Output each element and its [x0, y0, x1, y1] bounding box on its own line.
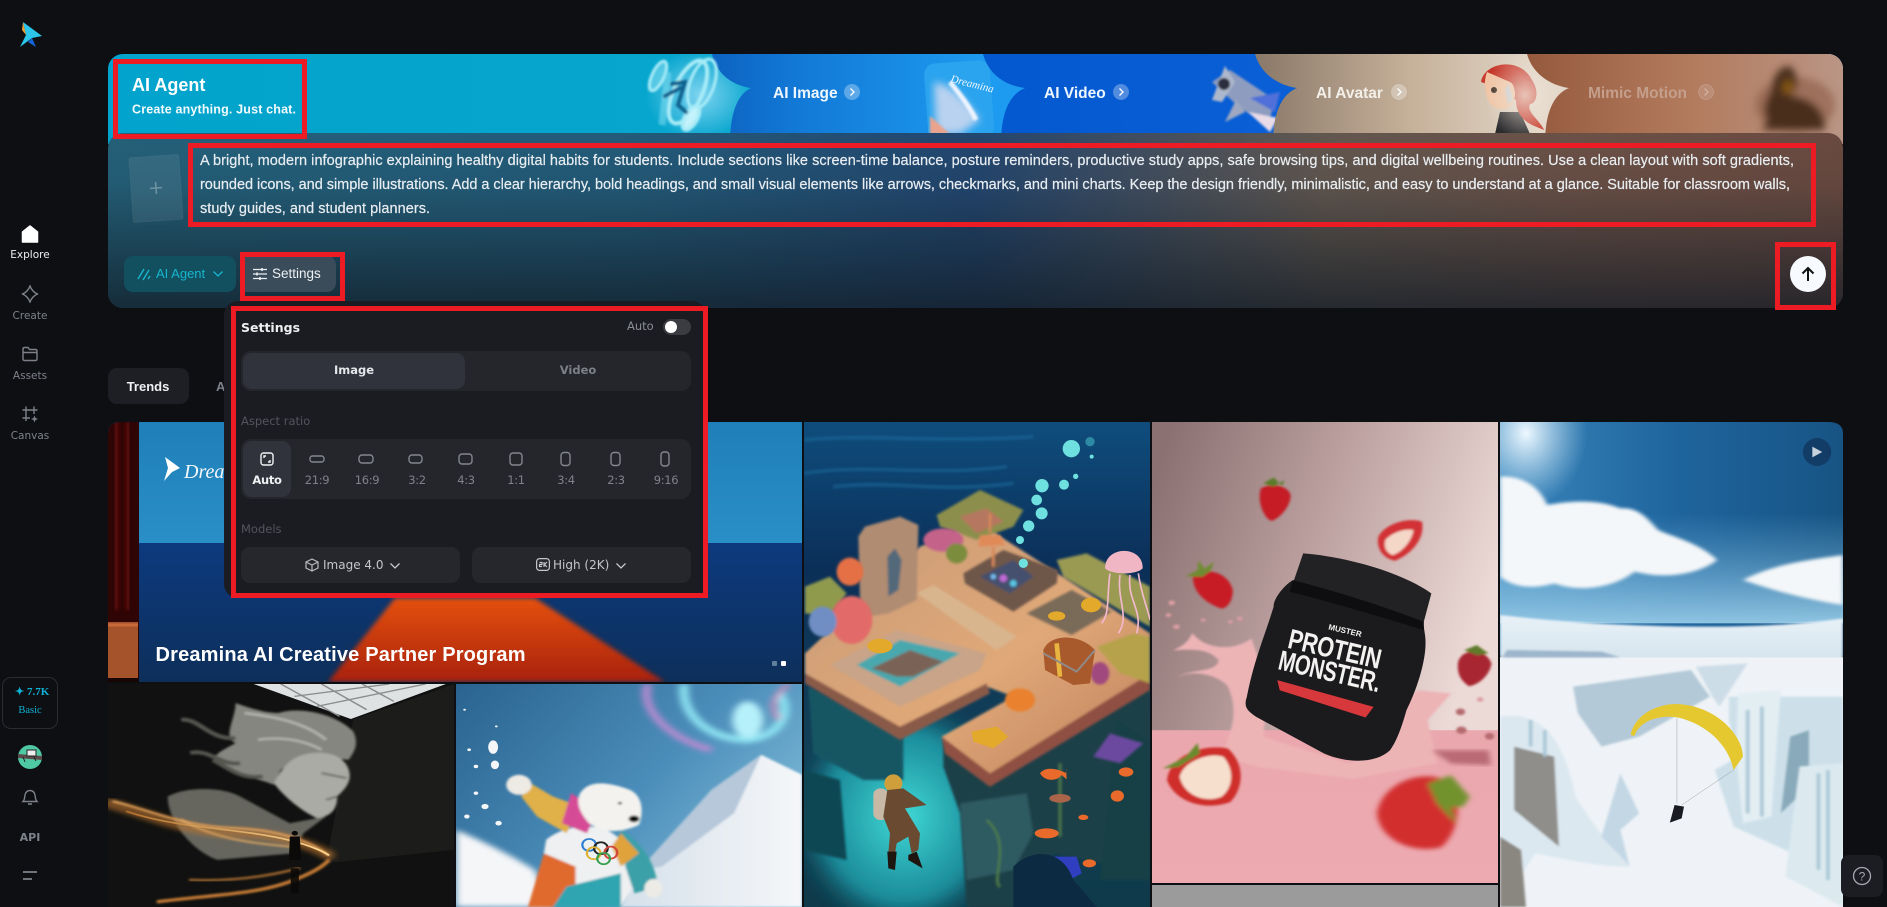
prompt text	[200, 153, 1794, 217]
sidebar	[2, 22, 58, 880]
highlight box: ai agent heading	[113, 59, 307, 139]
image: polar bear snowboarder	[456, 684, 802, 907]
button: ai agent mode	[124, 256, 236, 292]
tab: trends	[108, 368, 189, 404]
button: settings: Settings	[272, 266, 321, 281]
icon: notifications bell	[22, 790, 38, 805]
treasure chest	[1043, 638, 1095, 685]
diver	[873, 774, 927, 870]
strawberries	[1162, 477, 1491, 806]
stone arch	[858, 517, 918, 617]
nav: create	[13, 285, 47, 322]
avatar	[18, 745, 42, 769]
nav: assets: Assets	[13, 370, 47, 382]
hero panel background	[108, 54, 1843, 308]
ratio labels: 3:2	[408, 473, 426, 487]
video play badge	[1803, 438, 1831, 466]
prompt panel background	[108, 133, 1843, 323]
icon: app logo	[20, 22, 42, 47]
banner: teal ai agent section	[108, 54, 1843, 144]
settings popover	[224, 301, 706, 598]
tab: ai avatar: AI Avatar	[1316, 85, 1383, 102]
jar label text: MONSTER.	[1276, 645, 1383, 698]
tab: trends: Trends	[127, 379, 169, 394]
tab: mimic motion: Mimic Motion	[1588, 85, 1687, 102]
media type tabs	[241, 351, 691, 391]
banner: ai image section	[712, 54, 1843, 133]
sculpture head	[168, 703, 356, 860]
send button	[1790, 256, 1826, 292]
ratio labels: 4:3	[457, 473, 475, 487]
tab: ai image: AI Image	[773, 85, 838, 102]
light ribbon	[109, 802, 328, 902]
prompt text: study guides, and student planners.	[200, 201, 430, 217]
ratio labels: 9:16	[654, 473, 678, 487]
help button: ?	[1859, 870, 1866, 884]
illustration: ai video thumbnail	[924, 60, 994, 133]
icon: menu	[23, 871, 37, 880]
glow near ai image tip	[648, 54, 750, 133]
nav: canvas	[11, 406, 49, 442]
paraglider pilot	[1670, 805, 1684, 823]
highlight box: settings panel	[231, 306, 708, 598]
tab: ai avatar	[1316, 84, 1407, 102]
aspect ratio options	[241, 439, 691, 499]
ratio labels: 16:9	[355, 473, 379, 487]
aspect ratio label: Aspect ratio	[241, 414, 310, 428]
jar	[1246, 553, 1431, 761]
corals	[809, 528, 1143, 763]
image: partner program banner	[108, 422, 802, 682]
button: settings	[245, 256, 336, 292]
model selector	[241, 547, 460, 583]
curtain	[108, 422, 139, 682]
credits badge: ✦ 7.7K	[15, 686, 49, 698]
quality selector	[472, 547, 691, 583]
banner title: Dreamina AI Creative Partner Program	[156, 644, 526, 666]
settings title: Settings	[241, 320, 300, 335]
clouds	[1500, 477, 1843, 605]
dark rock	[1013, 854, 1097, 907]
gold objects	[867, 598, 1101, 748]
snow mountain	[621, 755, 802, 907]
ratio labels: 1:1	[507, 473, 525, 487]
polar bear	[506, 775, 663, 907]
dreamina logo	[164, 457, 224, 481]
horizon haze	[1500, 615, 1843, 663]
bubbles	[1016, 437, 1095, 568]
credits badge	[2, 677, 58, 729]
models label: Models	[241, 522, 282, 536]
illustration: glass runner	[646, 55, 722, 132]
ratio labels: 21:9	[305, 473, 329, 487]
carousel dots	[772, 661, 786, 666]
ice canyon	[1500, 650, 1843, 907]
treasure well	[963, 513, 1058, 612]
jar label text: PROTEIN	[1285, 623, 1384, 675]
help button	[1841, 855, 1883, 897]
illustration: airplane	[1212, 66, 1280, 132]
image: sculpture	[108, 684, 454, 905]
illustration: red-haired girl	[1481, 64, 1544, 134]
ratio labels: Auto	[252, 473, 282, 487]
banner: ai avatar section	[1255, 54, 1843, 133]
illustration: ai video thumbnail: Dreamina	[948, 73, 996, 96]
tab: image active: Image	[334, 363, 374, 377]
milk splash	[1166, 600, 1494, 779]
image: isometric underwater ruins	[804, 422, 1150, 907]
skylight	[254, 684, 446, 719]
prompt text: rounded icons, and simple illustrations. Add a clear hierarchy, bold headings, and small visual elements like arrows, checkmarks, and mini charts. Keep the design friendly, minimalistic, and easy to understand at a glance. Suitable for classroom walls,	[200, 177, 1790, 193]
snow plain	[1500, 657, 1843, 907]
option: auto active	[243, 441, 291, 497]
treasure table	[1027, 590, 1112, 635]
fish	[1035, 767, 1133, 883]
glow near mimic motion tip	[1491, 64, 1544, 133]
ratio labels: 3:4	[557, 473, 575, 487]
olympic rings	[582, 839, 617, 864]
illustration: silhouette	[1755, 66, 1835, 133]
api link: API	[20, 831, 40, 844]
auto toggle: Auto	[627, 319, 654, 333]
ratio labels	[252, 473, 678, 487]
highlight box: send button	[1775, 242, 1836, 310]
tab: image active	[243, 353, 465, 389]
yellow paraglider	[1631, 704, 1743, 805]
lower stone pillars	[804, 687, 1150, 907]
credits badge: Basic	[18, 705, 42, 716]
nav: canvas: Canvas	[11, 430, 49, 442]
nav: assets	[13, 346, 47, 382]
heading: ai agent	[132, 75, 296, 116]
nav: explore: Explore	[10, 249, 50, 261]
tab: partly hidden: A	[216, 379, 225, 394]
prompt text: A bright, modern infographic explaining healthy digital habits for students. Include sections like screen-time balance, posture reminders, productive study apps, safe browsing tips, and digital wellbeing routines. Use a clean layout with soft gradients,	[200, 153, 1794, 169]
heading: ai agent: AI Agent	[132, 75, 205, 95]
highlight box: settings button	[240, 252, 345, 301]
banner: mimic motion section	[1527, 54, 1843, 144]
add reference image card	[129, 154, 183, 223]
snow spray	[456, 709, 553, 907]
jellyfish	[1102, 551, 1150, 633]
image: protein monster product	[1152, 422, 1498, 883]
image: grey wood tile	[1152, 885, 1498, 907]
highlight box: prompt	[188, 143, 1816, 227]
standing figure	[289, 831, 301, 893]
aurora swirl	[646, 684, 788, 750]
tab: ai video: AI Video	[1044, 85, 1106, 102]
tab: ai video	[1044, 84, 1129, 102]
jar label text: MUSTER	[1328, 623, 1363, 639]
button: ai agent mode: AI Agent	[156, 266, 205, 281]
nav: create: Create	[13, 310, 47, 322]
nav: explore	[10, 225, 50, 261]
teal glow water	[790, 697, 1017, 907]
banner: ai video section	[983, 54, 1843, 133]
subheading: Create anything. Just chat.	[132, 102, 296, 116]
quality selector: High (2K)	[553, 558, 609, 572]
dreamina logo: Dreamina	[183, 461, 264, 483]
tab: video: Video	[560, 363, 596, 377]
auto toggle	[627, 319, 691, 335]
model selector: Image 4.0	[323, 558, 383, 572]
island stone platform	[805, 490, 1150, 787]
ratio labels: 2:3	[607, 473, 625, 487]
image: paraglider over ice canyon	[1500, 422, 1843, 907]
